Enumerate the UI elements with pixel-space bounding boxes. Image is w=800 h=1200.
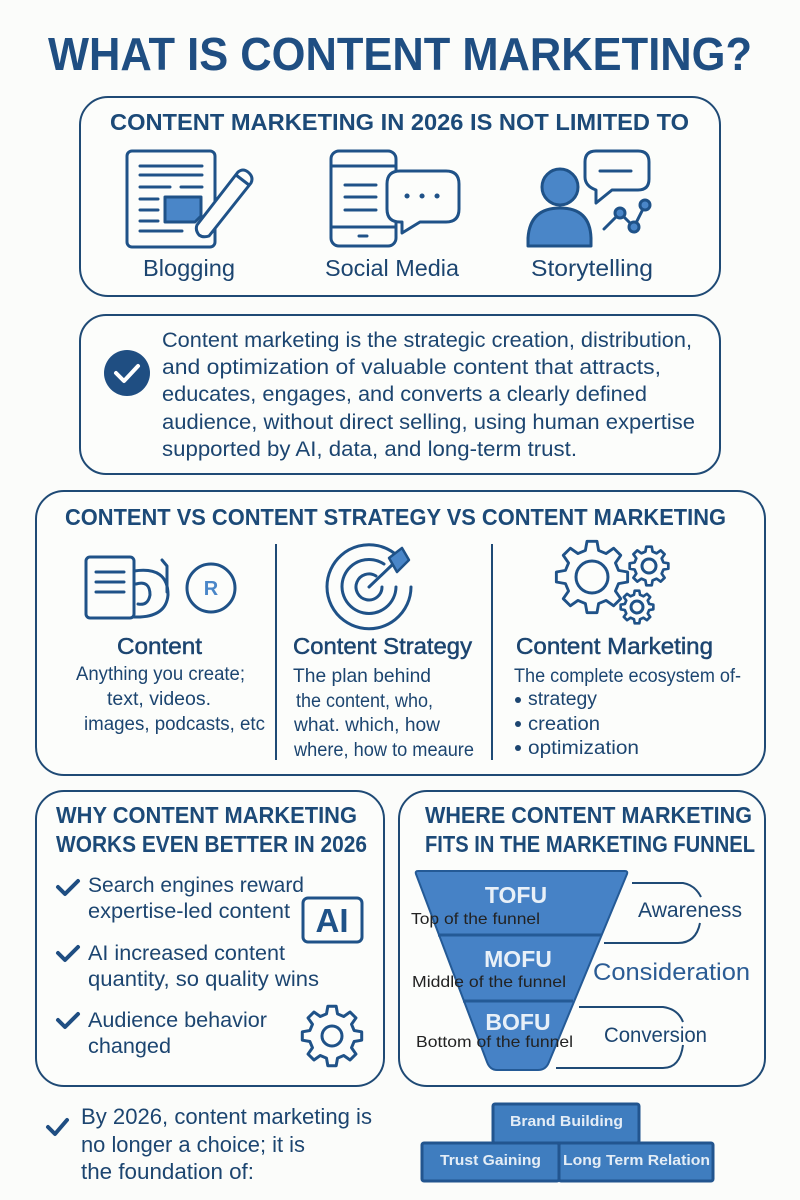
panel: content vs strategy vs marketing xyxy=(36,491,765,775)
conclusion text: no longer a choice; it is xyxy=(81,1132,305,1157)
bracket: conversion: Conversion xyxy=(604,1024,707,1047)
title: WHAT IS CONTENT MARKETING? xyxy=(48,28,752,80)
icon: gear xyxy=(302,1006,362,1066)
reason: AI quantity: quantity, so quality wins xyxy=(88,968,319,991)
icon: gears xyxy=(556,541,668,623)
column: content marketing: creation xyxy=(528,714,600,735)
column: content marketing: The complete ecosystem of- xyxy=(514,666,741,687)
icon: social media phone and speech bubble xyxy=(331,151,459,246)
conclusion text xyxy=(48,1104,372,1184)
column: content: images, podcasts, etc xyxy=(84,714,265,735)
block: brand building: Brand Building xyxy=(510,1113,623,1130)
definition text xyxy=(162,329,695,461)
icon: content document, swirl and badge: R xyxy=(204,578,219,600)
icon: target with arrow xyxy=(327,545,411,629)
reason: audience behavior: changed xyxy=(88,1035,171,1058)
block: long term relation xyxy=(559,1143,713,1181)
heading: where it fits: FITS IN THE MARKETING FUNNEL xyxy=(425,831,755,857)
reason: AI quantity: AI increased content xyxy=(88,942,285,965)
column: content xyxy=(76,633,265,735)
icon: check xyxy=(48,1120,67,1134)
bracket: awareness: Awareness xyxy=(638,899,742,922)
bracket: awareness xyxy=(604,883,742,943)
icon: blogging document and pencil xyxy=(127,151,252,247)
bracket: conversion xyxy=(556,1007,707,1068)
column: content: Anything you create; xyxy=(76,664,245,685)
heading: comparison: CONTENT VS CONTENT STRATEGY VS CONTENT MARKETING xyxy=(65,504,726,530)
stage: TOFU xyxy=(411,882,547,928)
definition text: audience, without direct selling, using human expertise xyxy=(162,411,695,434)
column: content: text, videos. xyxy=(107,689,211,710)
icon: AI box: AI xyxy=(316,902,348,939)
stage: MOFU: Middle of the funnel xyxy=(412,974,566,991)
stage: BOFU xyxy=(416,1009,573,1051)
heading: not limited to: CONTENT MARKETING IN 2026 IS NOT LIMITED TO xyxy=(110,109,689,135)
reason: search engines: expertise-led content xyxy=(88,900,290,923)
column: content strategy: where, how to meaure xyxy=(293,740,474,761)
column: content strategy: The plan behind xyxy=(293,666,431,687)
icon: check badge xyxy=(104,350,150,396)
stage: MOFU: MOFU xyxy=(484,946,552,972)
conclusion text: the foundation of: xyxy=(81,1159,254,1184)
stage: BOFU: Bottom of the funnel xyxy=(416,1034,573,1051)
label: storytelling: Storytelling xyxy=(531,255,653,281)
definition text: and optimization of valuable content that attracts, xyxy=(162,356,661,379)
stage: TOFU: TOFU xyxy=(485,882,547,908)
reason: search engines xyxy=(58,874,304,923)
panel: funnel xyxy=(399,791,765,1086)
block: trust gaining: Trust Gaining xyxy=(440,1152,541,1169)
label: consideration: Consideration xyxy=(593,959,750,986)
column: content strategy: the content, who, xyxy=(296,691,433,712)
label: blogging: Blogging xyxy=(143,255,235,281)
reason: audience behavior xyxy=(58,1009,267,1058)
pyramid: foundation blocks xyxy=(422,1104,713,1181)
column: content marketing: Content Marketing xyxy=(516,633,713,659)
column: content: Content xyxy=(117,633,203,659)
heading: where it fits: WHERE CONTENT MARKETING xyxy=(425,802,752,828)
funnel chart xyxy=(411,871,627,1070)
reason: AI quantity xyxy=(58,942,319,991)
column: content marketing: optimization xyxy=(528,738,639,759)
block: long term relation: Long Term Relation xyxy=(563,1152,710,1169)
heading: why it works: WORKS EVEN BETTER IN 2026 xyxy=(56,831,367,857)
icon: content document, swirl and badge xyxy=(86,557,235,618)
column: content marketing: strategy xyxy=(528,689,598,710)
stage: MOFU xyxy=(412,946,566,991)
heading: why it works xyxy=(56,802,367,857)
panel: definition xyxy=(80,315,720,474)
column: content strategy: what. which, how xyxy=(293,715,440,736)
definition text: educates, engages, and converts a clearly defined xyxy=(162,383,647,406)
stage: TOFU: Top of the funnel xyxy=(411,911,540,928)
panel: why content marketing works xyxy=(36,791,384,1086)
heading: where it fits xyxy=(425,802,755,857)
definition text: Content marketing is the strategic creation, distribution, xyxy=(162,329,692,352)
block: trust gaining xyxy=(422,1143,559,1181)
icon: storytelling person, speech bubble and graph xyxy=(528,151,650,246)
block: brand building xyxy=(493,1104,639,1143)
panel: not limited to xyxy=(80,97,720,296)
column: content strategy: Content Strategy xyxy=(293,633,473,659)
column: content marketing xyxy=(514,633,741,759)
heading: why it works: WHY CONTENT MARKETING xyxy=(56,802,357,828)
definition text: supported by AI, data, and long-term trust. xyxy=(162,438,577,461)
reason: audience behavior: Audience behavior xyxy=(88,1009,267,1032)
conclusion text: By 2026, content marketing is xyxy=(81,1104,372,1129)
label: social media: Social Media xyxy=(325,255,459,281)
reason: search engines: Search engines reward xyxy=(88,874,304,897)
column: content strategy xyxy=(293,633,474,761)
icon: AI box xyxy=(303,898,362,942)
stage: BOFU: BOFU xyxy=(485,1009,551,1035)
